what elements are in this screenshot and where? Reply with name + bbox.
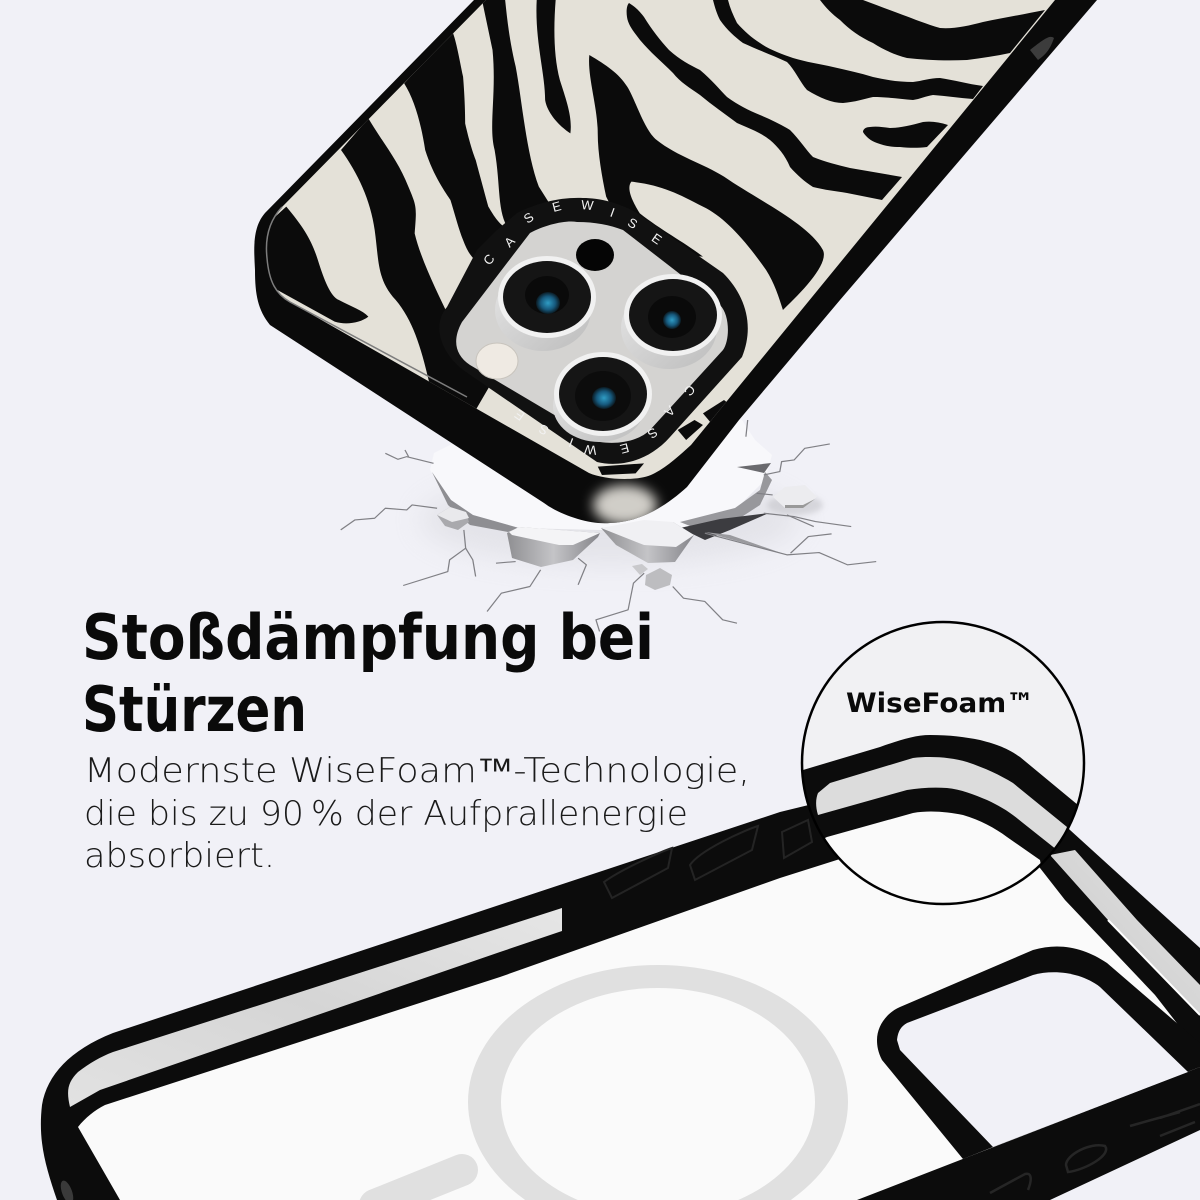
phone case outer bumper: [254, 0, 1097, 523]
body text: [84, 751, 750, 876]
side buttons: [604, 820, 812, 898]
camera plate: [456, 222, 728, 443]
top phone with zebra case: [250, 0, 1100, 525]
zebra pattern back: [276, 0, 1055, 479]
illustration: cracked ground impact: [341, 420, 876, 631]
lens 2: [624, 274, 722, 356]
frame bottom edge details: [990, 1104, 1200, 1193]
body text: die bis zu 90 % der Aufprallenergie: [84, 794, 688, 834]
MagSafe pill: [375, 1170, 462, 1200]
bumper highlight: [593, 37, 1054, 525]
glass edge highlight: [266, 207, 467, 397]
clear back panel: [78, 830, 1200, 1200]
lens 3: [554, 352, 652, 436]
lens sleeves: [495, 269, 717, 442]
magnified corner: [803, 735, 1076, 902]
magnifier callout: [800, 620, 1086, 906]
brand text lower: CASEWISE: [511, 382, 698, 458]
flash: [476, 343, 518, 379]
side gap strip: [68, 908, 562, 1107]
speaker hole: [58, 1179, 76, 1200]
lens 1: [498, 256, 596, 338]
magnifier outline: [802, 622, 1084, 904]
bottom phone: clear case with black frame: [41, 760, 1200, 1200]
frame: [41, 760, 1200, 1200]
camera bump: [439, 197, 748, 464]
body text: absorbiert.: [84, 836, 275, 876]
heading: [82, 601, 654, 746]
heading: Stürzen: [82, 673, 307, 746]
magnifier label: WiseFoam™: [846, 688, 1034, 719]
camera cutout rim: [877, 946, 1200, 1159]
camera ring: [439, 198, 748, 464]
microphone hole: [576, 239, 614, 271]
body text: Modernste WiseFoam™-Technologie,: [84, 751, 750, 791]
camera cutout: [897, 972, 1188, 1147]
brand text upper: CASEWISE: [480, 197, 665, 268]
right gap strip: [1050, 850, 1200, 1015]
MagSafe ring: [468, 965, 848, 1200]
heading: Stoßdämpfung bei: [82, 601, 654, 674]
